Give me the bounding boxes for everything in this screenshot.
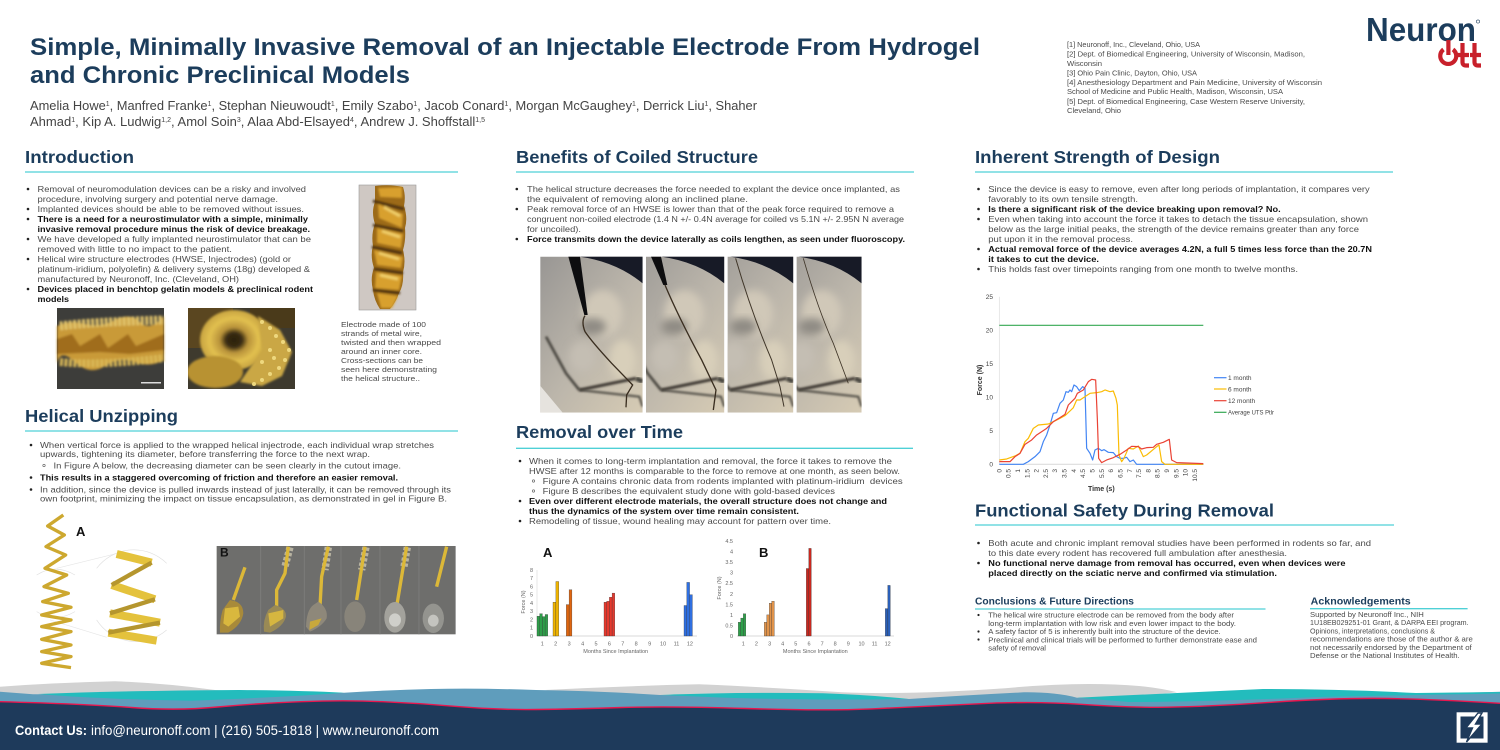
text block: safety bullets xyxy=(977,538,1371,578)
text block: acknowledgements: Opinions, interpretations, conclusions & xyxy=(1310,626,1435,636)
fluoroscopy frame 3 xyxy=(728,256,794,412)
title xyxy=(30,34,980,89)
title: Simple, Minimally Invasive Removal of an Injectable Electrode From Hydrogel xyxy=(30,34,980,61)
figure A: helix illustration xyxy=(37,515,167,668)
text block: introduction bullets: invasive removal procedure minus the risk of device breakage. xyxy=(38,224,310,234)
text block: introduction bullets: Implanted devices should be able to be removed without issues. xyxy=(38,204,304,214)
text block: acknowledgements: Supported by Neuronoff Inc., NIH xyxy=(1310,610,1424,619)
text block: introduction bullets: Devices placed in benchtop gelatin models & preclinical rodent xyxy=(38,284,313,294)
text block: conclusions bullets: safety of removal xyxy=(988,643,1046,652)
bar chart A: 7 xyxy=(621,642,624,648)
bar chart B: 4 xyxy=(781,642,784,648)
logo: NeuronOff xyxy=(1366,11,1481,66)
text block: introduction bullets: removed with little to no impact to the patient. xyxy=(38,244,232,254)
bar chart B: 2 xyxy=(730,592,733,598)
fluoroscopy frame 1 xyxy=(533,257,643,413)
text block: strength bullets: Since the device is easy to remove, even after long periods of implantation, it compares very xyxy=(988,184,1371,194)
fluoroscopy frame 4 xyxy=(796,256,862,412)
text block: safety bullets: to this date every rodent has recovered full ambulation after anesthesia. xyxy=(988,548,1287,558)
text block: removal bullets: HWSE after 12 months is comparable to the force to remove at one month, as seen below. xyxy=(529,466,900,476)
bar chart A: 6 xyxy=(530,584,533,590)
text block: strength bullets: Even when taking into account the force it takes to detach the tissue encapsulation, shown xyxy=(988,214,1368,224)
text block: introduction bullets: Removal of neuromodulation devices can be a risky and involved xyxy=(38,184,306,194)
text block: strength bullets: it takes to cut the device. xyxy=(988,254,1099,264)
heading: inherent strength: Inherent Strength of Design xyxy=(975,147,1220,167)
line chart: force over time: 4.5 xyxy=(1080,469,1087,478)
bar chart B: 1.5 xyxy=(725,602,733,608)
bar chart A: 9 xyxy=(648,642,651,648)
bar chart B: 2 xyxy=(755,642,758,648)
text block: safety bullets: placed directly on the sciatic nerve and confirmed via stimulation. xyxy=(988,568,1277,578)
figure A: helix illustration: A xyxy=(76,524,86,539)
text block: removal bullets: Even over different electrode materials, the overall structure does not change and xyxy=(529,496,887,506)
affiliations xyxy=(1067,40,1322,115)
authors: , Morgan McGaughey xyxy=(508,98,633,113)
text block: benefits bullets: Force transmits down the device laterally as coils lengthen, as seen under fluoroscopy. xyxy=(527,234,905,244)
caption: electrode description: Cross-sections can be xyxy=(341,356,423,365)
text block: removal bullets: Figure B describes the equivalent study done with gold-based devices xyxy=(543,486,835,496)
authors: , Alaa Abd-Elsayed xyxy=(241,114,350,129)
panel: functional safety during removal xyxy=(975,500,1394,578)
panel: inherent strength of design xyxy=(975,147,1393,493)
line chart: force over time: 8 xyxy=(1145,469,1152,473)
line chart: force over time: 6 xyxy=(1108,469,1115,473)
heading: acknowledgements: Acknowledgements xyxy=(1311,596,1411,608)
line chart: force over time: 10 xyxy=(986,395,993,402)
bar chart A: 8 xyxy=(635,642,638,648)
line chart: force over time: 9.5 xyxy=(1173,469,1180,478)
text block: acknowledgements: recommendations are those of the author & are xyxy=(1310,634,1473,644)
figure B: gel removal photo strip: B xyxy=(220,546,229,560)
bar chart B: 7 xyxy=(821,642,824,648)
bar chart B: 1 xyxy=(742,642,745,648)
text block: removal bullets: Figure A contains chronic data from rodents implanted with platinum-iridium devices xyxy=(543,476,903,486)
text block: introduction bullets: procedure, involving surgery and potential nerve damage. xyxy=(38,194,278,204)
text block: benefits bullets: Peak removal force of an HWSE is lower than that of the peak force required to remove a xyxy=(527,204,894,214)
authors: , Amol Soin xyxy=(171,114,237,129)
bar chart B: 3 xyxy=(730,571,733,577)
line chart: force over time: 8.5 xyxy=(1155,469,1162,478)
authors: , Andrew J. Shoffstall xyxy=(354,114,475,129)
authors: 1 xyxy=(71,117,75,124)
text block: acknowledgements: not necessarily endorsed by the Department of xyxy=(1310,643,1472,652)
contact line: info@neuronoff.com | (216) 505-1818 | www.neuronoff.com xyxy=(91,723,439,738)
bar chart A: 0 xyxy=(530,634,533,640)
text block: conclusions bullets xyxy=(977,611,1257,652)
line chart: force over time: 10.5 xyxy=(1192,469,1199,482)
bar chart B: Force (N) xyxy=(717,576,723,600)
panel: introduction xyxy=(25,147,458,389)
bar chart B: 4.5 xyxy=(725,539,733,545)
chart legend: 12 month xyxy=(1228,398,1255,405)
affiliations: Cleveland, Ohio xyxy=(1067,106,1121,115)
panel: removal over time xyxy=(516,422,913,655)
affiliations: Wisconsin xyxy=(1067,59,1102,68)
heading: conclusions: Conclusions & Future Directions xyxy=(975,596,1134,608)
text block: unzipping bullets: In addition, since the device is pulled inwards instead of just laterally, it can be removed through its xyxy=(40,484,451,494)
panel: acknowledgements xyxy=(1310,596,1473,660)
authors: 1 xyxy=(705,101,708,108)
bar chart B: 10 xyxy=(858,642,865,648)
bar chart A: 12 xyxy=(687,642,693,648)
panel: benefits of coiled structure xyxy=(516,147,914,413)
bar chart A: 6 xyxy=(608,642,611,648)
authors: 4 xyxy=(350,117,354,124)
logo: NeuronOff: Neuron xyxy=(1366,11,1476,48)
affiliations: School of Medicine and Public Health, Madison, Wisconsin, USA xyxy=(1067,87,1283,96)
heading: introduction: Introduction xyxy=(25,147,134,167)
line chart: force over time xyxy=(977,294,1275,493)
panel: helical unzipping xyxy=(25,406,458,668)
line chart: force over time: 0 xyxy=(989,462,993,469)
footer waves xyxy=(0,681,1500,750)
line chart: force over time: 1 xyxy=(1015,469,1022,473)
text block: removal bullets: When it comes to long-term implantation and removal, the force it takes to remove the xyxy=(529,456,892,466)
heading: helical unzipping: Helical Unzipping xyxy=(25,406,178,426)
heading: functional safety: Functional Safety During Removal xyxy=(975,500,1274,520)
line chart: force over time: 10 xyxy=(1183,469,1190,476)
authors: , Kip A. Ludwig xyxy=(75,114,161,129)
text block: unzipping bullets: When vertical force is applied to the wrapped helical injectrode, each individual wrap stretches xyxy=(40,440,434,450)
text block: unzipping bullets: own footprint, minimizing the impact on tissue encapsulation, as demonstrated in gel in Figure B. xyxy=(40,494,447,504)
authors: , Manfred Franke xyxy=(110,98,208,113)
authors: 1 xyxy=(208,101,212,108)
affiliations: [2] Dept. of Biomedical Engineering, University of Wisconsin, Madison, xyxy=(1067,50,1305,58)
line chart: force over time: Force (N) xyxy=(977,365,984,395)
text block: strength bullets: Is there a significant risk of the device breaking upon removal? No. xyxy=(988,204,1281,214)
bar chart B: Months Since Implantation xyxy=(783,649,848,655)
caption: electrode description xyxy=(341,320,441,383)
text block: removal bullets: Remodeling of tissue, wound healing may account for pattern over time. xyxy=(529,516,831,526)
photo: electrode braid xyxy=(359,185,416,310)
line chart: force over time: 1.5 xyxy=(1024,469,1031,478)
line chart: force over time: 4 xyxy=(1071,469,1078,473)
authors: 1,2 xyxy=(161,117,171,124)
text block: introduction bullets xyxy=(27,184,313,304)
caption: electrode description: twisted and then wrapped xyxy=(341,338,441,347)
affiliations: [5] Dept. of Biomedical Engineering, Case Western Reserve University, xyxy=(1067,97,1305,106)
bar chart A: 1 xyxy=(541,642,544,648)
caption: electrode description: seen here demonstrating xyxy=(341,365,437,374)
text block: strength bullets: favorably to its own tensile strength. xyxy=(988,194,1138,204)
line chart: force over time: 20 xyxy=(986,328,993,334)
line chart: force over time: 15 xyxy=(986,361,993,368)
authors: Ahmad xyxy=(30,114,71,129)
text block: conclusions bullets: A safety factor of 5 is inherently built into the structure of the device. xyxy=(988,627,1221,636)
text block: unzipping bullets: upwards, tightening its diameter, before transferring the force to the next wrap. xyxy=(40,449,370,459)
bar chart A: Force (N) xyxy=(521,590,527,614)
bar chart A: 1 xyxy=(530,626,533,632)
text block: strength bullets: below as the large initial peaks, the strength of the device remains greater than any force xyxy=(988,224,1359,234)
text block: acknowledgements xyxy=(1310,610,1473,660)
figure B: gel removal photo strip xyxy=(217,546,456,634)
icon: lightning mark xyxy=(1457,712,1488,743)
text block: safety bullets: No functional nerve damage from removal has occurred, even when devices were xyxy=(988,558,1346,568)
panel: conclusions and future directions xyxy=(975,596,1266,652)
line chart: force over time: Time (s) xyxy=(1088,486,1115,493)
authors: , Shaher xyxy=(708,98,758,113)
line chart: force over time: 2.5 xyxy=(1043,469,1050,478)
figure: fluoroscopy sequence xyxy=(533,257,862,413)
text block: acknowledgements: Defense or the National Institutes of Health. xyxy=(1310,651,1460,660)
text block: introduction bullets: platinum-iridium, polyolefin) & delivery systems (18g) developed & xyxy=(38,264,311,274)
line chart: force over time: 2 xyxy=(1034,469,1041,473)
authors xyxy=(30,98,758,129)
authors: 1 xyxy=(504,101,508,108)
bar chart B: 11 xyxy=(872,642,877,648)
authors: 1 xyxy=(632,101,636,108)
text block: unzipping bullets: This results in a staggered overcoming of friction and therefore an easier removal. xyxy=(40,472,398,482)
footer band xyxy=(0,681,1500,750)
text block: safety bullets: Both acute and chronic implant removal studies have been performed in rodents so far, and xyxy=(988,538,1371,548)
bar chart A: 2 xyxy=(554,642,557,648)
bar chart B: 3.5 xyxy=(725,560,733,566)
photo: electrode cross-section side view xyxy=(57,308,164,389)
bar chart A: A xyxy=(543,545,553,560)
line chart: force over time: 25 xyxy=(986,294,993,301)
text block: benefits bullets: congruent non-coiled electrode (1.4 N +/- 0.4N average for coiled vs 5.1N +/- 2.95N N average xyxy=(527,214,904,224)
bar chart B: 5 xyxy=(794,642,797,648)
bar chart B: 9 xyxy=(847,642,850,648)
line chart: force over time: 0 xyxy=(996,469,1003,473)
authors: 1 xyxy=(106,101,110,108)
bar chart B: B xyxy=(759,545,768,560)
authors: 3 xyxy=(237,117,241,124)
line chart: force over time: 3 xyxy=(1052,469,1059,473)
text block: conclusions bullets: The helical wire structure electrode can be removed from the body after xyxy=(988,611,1235,620)
bar chart B: 3 xyxy=(768,642,771,648)
text block: introduction bullets: models xyxy=(38,294,69,304)
authors: , Emily Szabo xyxy=(335,98,413,113)
text block: acknowledgements: 1U18EB029251-01 Grant, & DARPA EEI program. xyxy=(1310,618,1469,627)
photo: electrode cross-section end view xyxy=(187,308,295,389)
bar chart A: 10 xyxy=(660,642,666,648)
bar chart A: 11 xyxy=(674,642,679,648)
chart legend: 6 month xyxy=(1228,386,1252,393)
authors: , Derrick Liu xyxy=(636,98,705,113)
bar chart B: 6 xyxy=(807,642,811,648)
text block: unzipping bullets xyxy=(30,440,451,504)
text block: strength bullets xyxy=(977,184,1372,274)
bar chart A: Months Since Implantation xyxy=(583,649,648,655)
text block: introduction bullets: We have developed a fully implanted neurostimulator that can be xyxy=(38,234,311,244)
line chart: force over time: 5 xyxy=(1090,469,1096,473)
affiliations: [3] Ohio Pain Clinic, Dayton, Ohio, USA xyxy=(1067,68,1197,78)
bar chart A: 5 xyxy=(530,593,533,599)
bar chart A: 4 xyxy=(581,642,584,648)
text block: conclusions bullets: Preclinical and clinical trials will be performed to further demonstrate ease and xyxy=(988,635,1257,644)
bar chart A: 5 xyxy=(594,642,598,648)
bar chart B: 1 xyxy=(730,613,733,619)
authors: 1 xyxy=(413,101,417,108)
authors: 1 xyxy=(331,101,335,108)
line chart: force over time: 6.5 xyxy=(1118,469,1124,478)
caption: electrode description: around an inner core. xyxy=(341,347,422,356)
bar chart B: 2.5 xyxy=(725,581,733,587)
text block: removal bullets xyxy=(519,456,903,526)
bar chart B: 0.5 xyxy=(725,623,733,629)
authors: , Jacob Conard xyxy=(417,98,504,113)
bar chart A: 8 xyxy=(530,568,533,574)
text block: unzipping bullets: In Figure A below, the decreasing diameter can be seen clearly in the cutout image. xyxy=(54,460,401,470)
bar chart B xyxy=(717,539,894,655)
line chart: force over time: 3.5 xyxy=(1062,469,1068,478)
text block: removal bullets: thus the dynamics of the system over time remain consistent. xyxy=(529,506,799,516)
caption: electrode description: strands of metal wire, xyxy=(341,329,422,338)
text block: introduction bullets: manufactured by Neuronoff, Inc. (Cleveland, OH) xyxy=(38,274,239,284)
text block: introduction bullets: Helical wire structure electrodes (HWSE, Injectrodes) (gold or xyxy=(38,254,291,264)
bar chart B: 8 xyxy=(834,642,837,648)
line chart: force over time: 5 xyxy=(989,428,993,435)
bar chart A: 3 xyxy=(530,609,533,615)
bar chart B: 12 xyxy=(885,642,891,648)
bar chart A: 2 xyxy=(530,618,533,624)
line chart: force over time: 7 xyxy=(1127,469,1134,473)
title: and Chronic Preclinical Models xyxy=(30,62,410,89)
text block: benefits bullets: the equivalent of removing along an inclined plane. xyxy=(527,194,748,204)
bar chart B: 4 xyxy=(730,550,733,556)
bar chart A xyxy=(521,545,697,655)
heading: removal over time: Removal over Time xyxy=(516,422,683,442)
text block: introduction bullets: There is a need for a neurostimulator with a simple, minimally xyxy=(38,214,308,224)
contact line: Contact Us: xyxy=(15,723,87,738)
affiliations: [4] Anesthesiology Department and Pain Medicine, University of Wisconsin xyxy=(1067,78,1322,87)
authors: 1,5 xyxy=(475,117,485,124)
bar chart A: 4 xyxy=(530,601,533,607)
authors: , Stephan Nieuwoudt xyxy=(211,98,331,113)
text block: strength bullets: put upon it in the removal process. xyxy=(988,234,1133,244)
caption: electrode description: Electrode made of 100 xyxy=(341,320,426,329)
affiliations: [1] Neuronoff, Inc., Cleveland, Ohio, USA xyxy=(1067,40,1200,49)
text block: benefits bullets: for uncoiled). xyxy=(527,224,581,234)
text block: strength bullets: This holds fast over timepoints ranging from one month to twelve months. xyxy=(988,264,1298,274)
chart legend: 1 month xyxy=(1228,375,1252,382)
fluoroscopy frame 2 xyxy=(646,256,724,412)
heading: benefits: Benefits of Coiled Structure xyxy=(516,147,758,167)
bar chart A: 7 xyxy=(530,576,533,582)
chart legend: Average UTS Ptlr xyxy=(1228,410,1275,417)
caption: electrode description: the helical structure.. xyxy=(341,374,420,383)
authors: Amelia Howe xyxy=(30,98,107,113)
line chart: force over time: 0.5 xyxy=(1006,469,1013,478)
line chart: force over time: 9 xyxy=(1164,469,1171,473)
line chart: force over time: 5.5 xyxy=(1099,469,1106,478)
bar chart B: 0 xyxy=(730,634,733,640)
text block: conclusions bullets: long-term implantation with low risk and even lower impact to the body. xyxy=(988,619,1236,628)
line chart: force over time: 7.5 xyxy=(1136,469,1143,478)
text block: benefits bullets: The helical structure decreases the force needed to explant the device once implanted, as xyxy=(527,184,900,194)
text block: strength bullets: Actual removal force of the device averages 4.2N, a full 5 times less force than the 20.7N xyxy=(988,244,1372,254)
bar chart A: 3 xyxy=(568,642,571,648)
text block: benefits bullets xyxy=(516,184,905,244)
chart legend xyxy=(1214,375,1275,417)
